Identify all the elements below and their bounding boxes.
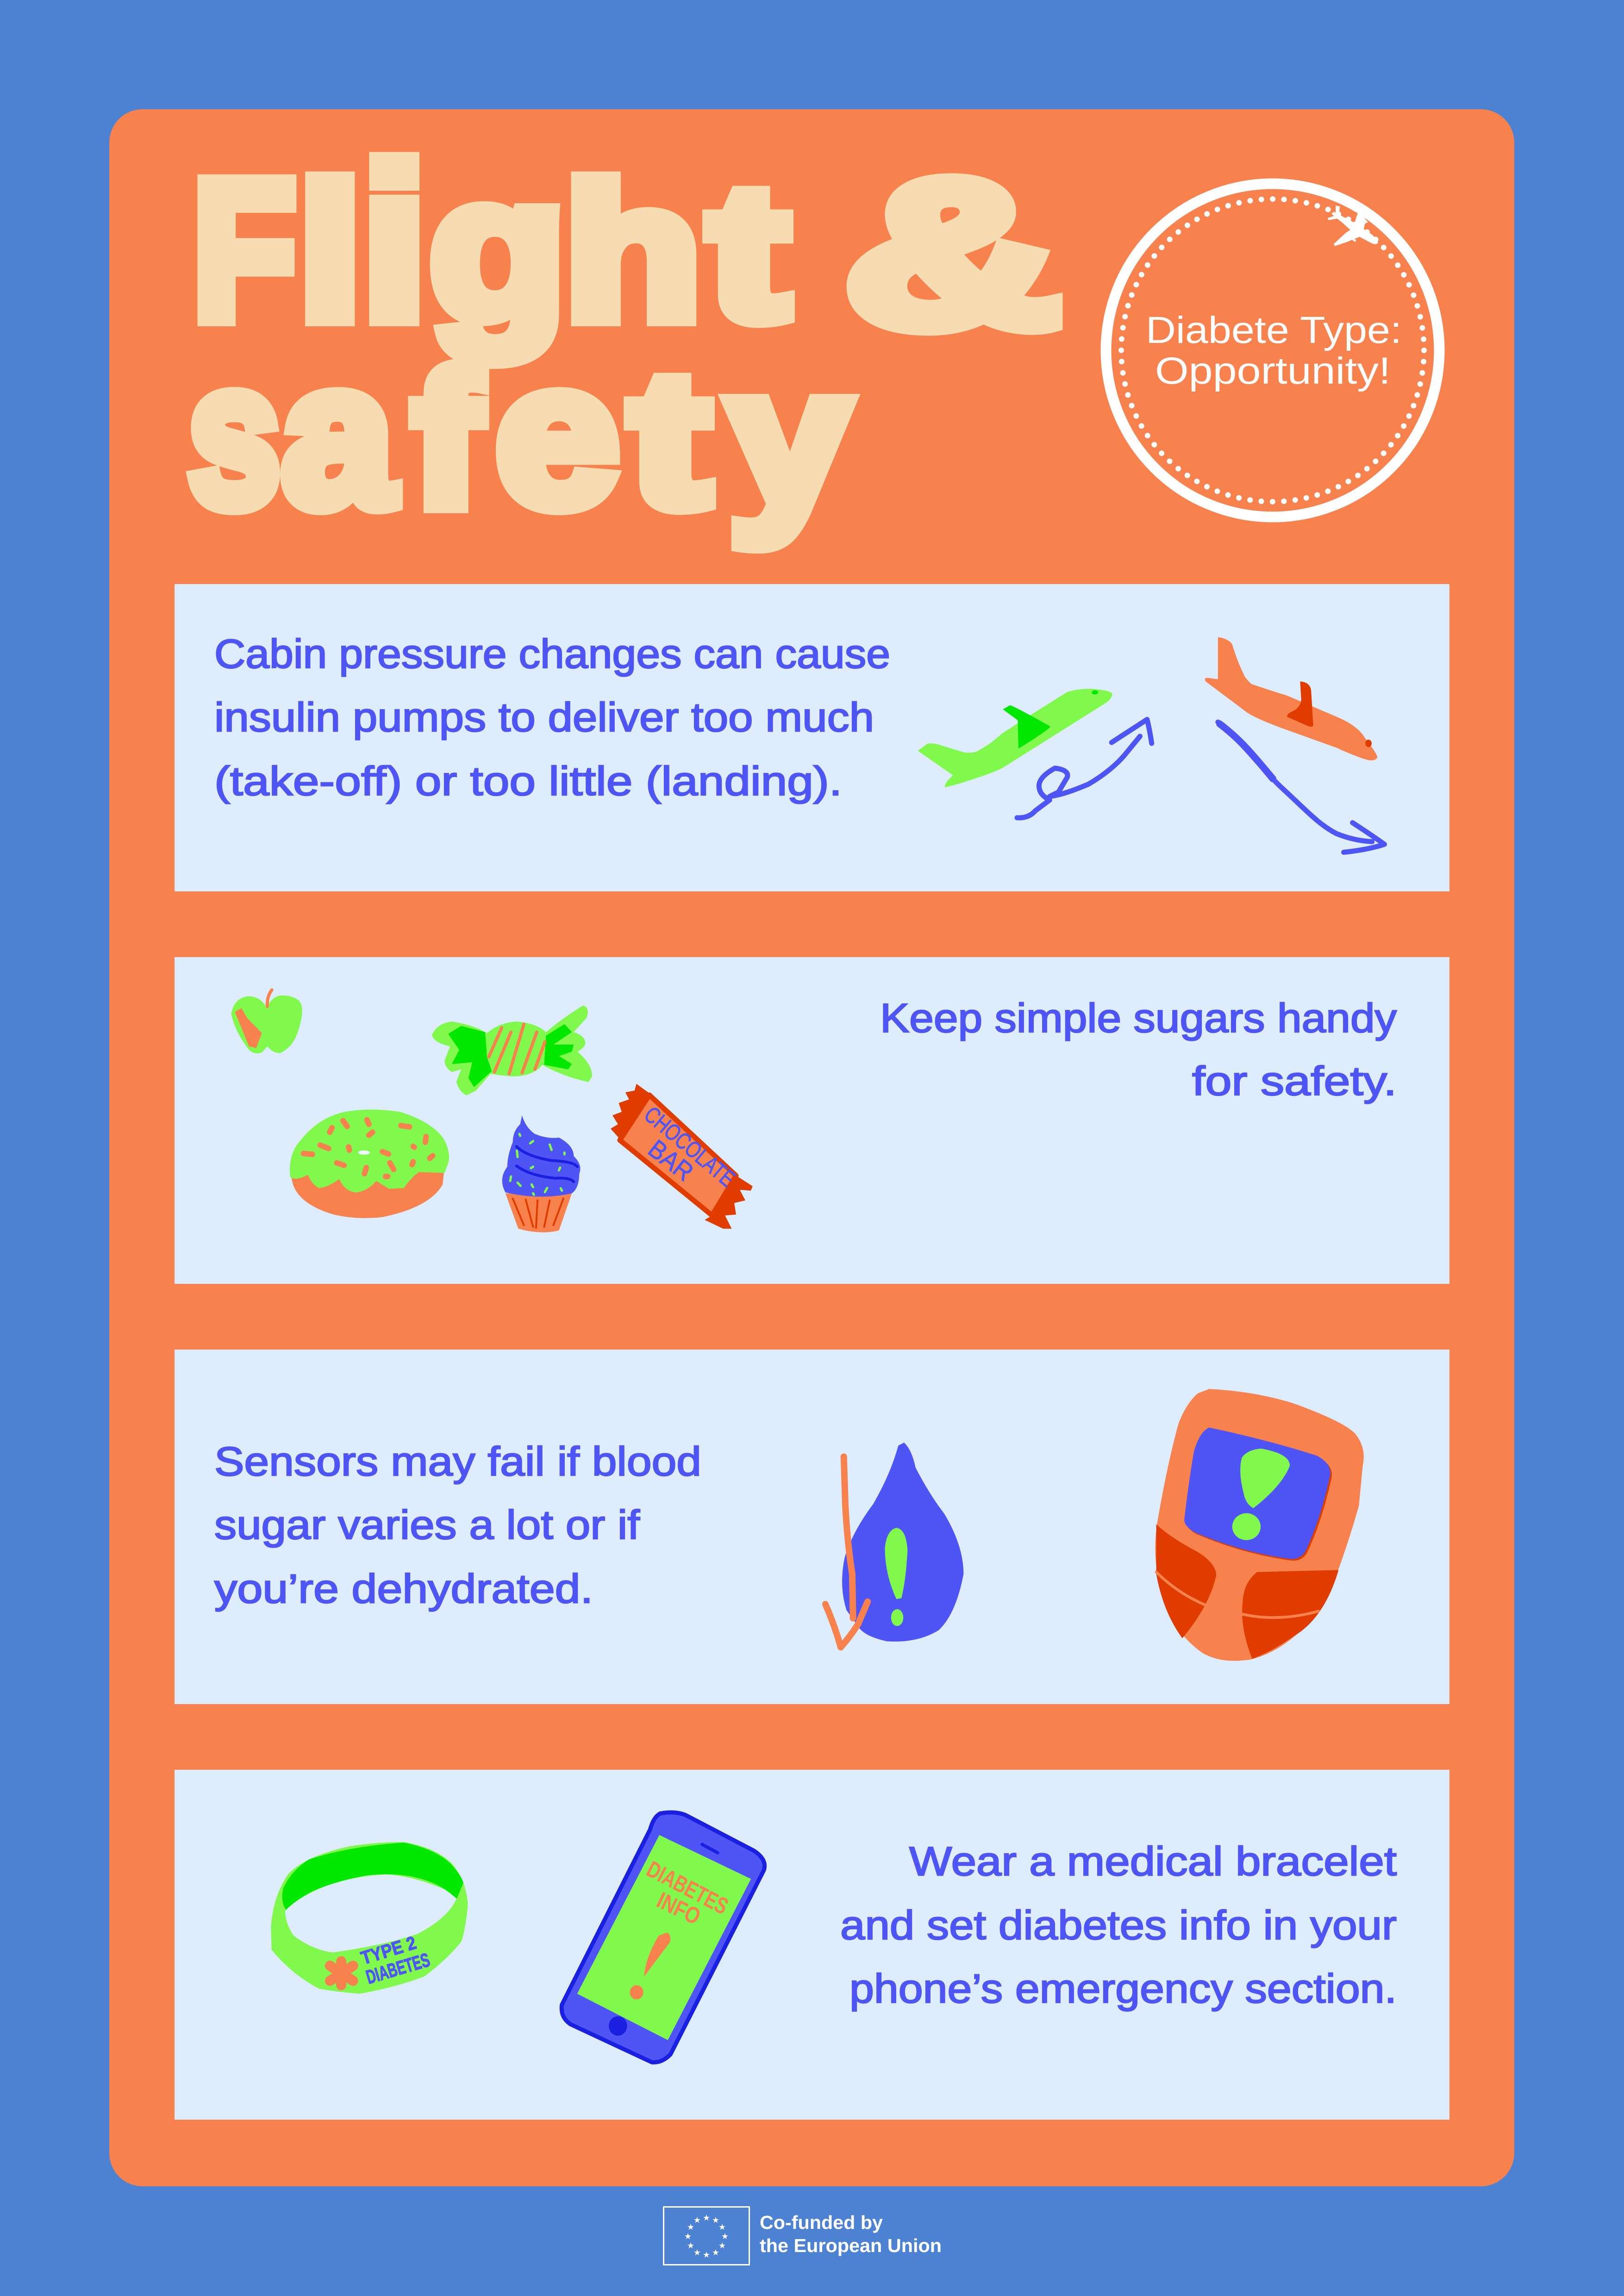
arrow down orange: [825, 1456, 868, 1647]
panel: sensors: [175, 1350, 1449, 1704]
title: Flight & safety: i: [362, 121, 427, 364]
EU stars: ★: [718, 2241, 726, 2251]
EU stars: ★: [693, 2248, 701, 2258]
text: bracelet label: [359, 1933, 432, 1988]
cupcake: [502, 1115, 580, 1232]
title: Flight & safety: y: [730, 329, 849, 548]
title: Flight & safety: t: [631, 334, 709, 545]
text: chocolate bar wrapper label: [639, 1101, 740, 1192]
logo: EU co-funded: [664, 2207, 942, 2265]
panel: bracelet and phone: [175, 1770, 1449, 2120]
text: simple sugars: for safety.: [1192, 1058, 1397, 1104]
icon: drop and meter: [825, 1389, 1364, 1661]
text: bracelet label: TYPE 2: [359, 1933, 418, 1969]
text: bracelet: phone’s emergency section.: [849, 1966, 1397, 2011]
donut: [290, 1110, 449, 1218]
text: bracelet: [840, 1838, 1397, 2011]
text: cabin pressure: Cabin pressure changes can cause: [214, 631, 890, 677]
EU stars: ★: [687, 2241, 694, 2251]
title: Flight & safety: a: [282, 321, 395, 548]
EU stars: ★: [693, 2215, 701, 2225]
EU stars: ★: [712, 2215, 719, 2225]
chocolate bar: [611, 1084, 753, 1229]
candy: [432, 1006, 592, 1095]
title: Flight & safety: [188, 121, 1060, 548]
title: Flight & safety: l: [300, 145, 361, 359]
green plane taking off: [918, 689, 1112, 787]
text: phone screen label: INFO: [653, 1887, 705, 1930]
text: sensors: Sensors may fail if blood: [214, 1438, 701, 1484]
title: Flight & safety: g: [430, 136, 565, 362]
badge: Diabete Type Opportunity: [1106, 184, 1439, 517]
title: Flight & safety: &: [845, 137, 1060, 370]
EU stars: ★: [703, 2213, 710, 2223]
apple: [231, 990, 302, 1053]
text: sensors: [214, 1438, 701, 1612]
badge: Diabete Type Opportunity: Opportunity!: [1155, 350, 1391, 392]
arrow up with loop: [1017, 719, 1152, 818]
medical bracelet: [271, 1842, 468, 1994]
phone: [562, 1812, 765, 2062]
EU stars: ★: [712, 2248, 719, 2258]
EU stars: ★: [684, 2232, 692, 2241]
EU stars: ★: [721, 2232, 729, 2241]
title: Flight & safety: s: [188, 321, 280, 548]
text: bracelet: Wear a medical bracelet: [909, 1838, 1397, 1884]
text: bracelet label: DIABETES: [363, 1949, 432, 1988]
EU stars: [684, 2213, 729, 2260]
text: phone screen label: DIABETES: [643, 1856, 732, 1919]
text: chocolate bar wrapper label: CHOCOLATE: [639, 1101, 740, 1192]
EU stars: ★: [703, 2250, 710, 2260]
text: co-funded by: the European Union: [760, 2235, 942, 2256]
title: Flight & safety: t: [710, 147, 787, 358]
panel: simple sugars: [175, 957, 1449, 1284]
icon: sweets group: [231, 990, 753, 1232]
orange main card: [109, 109, 1514, 2186]
EU stars: ★: [687, 2222, 694, 2232]
title: Flight & safety: h: [565, 145, 700, 359]
arrow down: [1218, 722, 1385, 852]
text: cabin pressure: (take-off) or too little (landing).: [214, 758, 842, 804]
text: sensors: you’re dehydrated.: [214, 1566, 593, 1612]
blood drop with alert: [842, 1443, 963, 1642]
text: bracelet: and set diabetes info in your: [840, 1902, 1397, 1948]
icon: bracelet and phone art: [271, 1812, 765, 2062]
text: simple sugars: Keep simple sugars handy: [880, 995, 1397, 1041]
title: Flight & safety: e: [496, 321, 618, 548]
orange plane landing: [1205, 637, 1377, 760]
EU stars: ★: [718, 2222, 726, 2232]
text: cabin pressure: [214, 631, 890, 804]
panel: cabin pressure: [175, 584, 1449, 891]
badge: Diabete Type Opportunity: Diabete Type:: [1146, 309, 1402, 351]
text: simple sugars: [880, 995, 1397, 1104]
icon: white airplane: [1328, 205, 1378, 246]
text: sensors: sugar varies a lot or if: [214, 1502, 640, 1548]
text: chocolate bar wrapper label: BAR: [643, 1134, 699, 1187]
glucose meter: [1155, 1389, 1364, 1661]
icon: planes and arrows: [918, 637, 1385, 852]
title: Flight & safety: f: [413, 332, 482, 546]
text: cabin pressure: insulin pumps to deliver too much: [214, 694, 874, 740]
title: Flight & safety: F: [194, 140, 295, 360]
text: co-funded by: Co-funded by: [760, 2212, 883, 2233]
